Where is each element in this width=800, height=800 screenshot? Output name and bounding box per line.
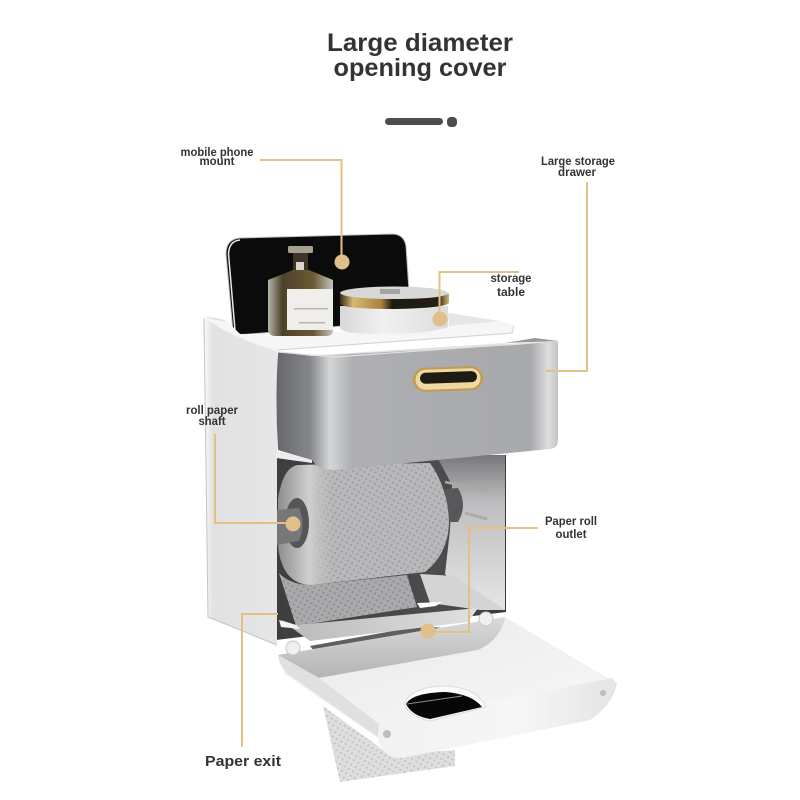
shelf under drawer bbox=[276, 451, 312, 463]
drawer contents bbox=[318, 343, 514, 358]
callout: large storage drawer bbox=[541, 156, 615, 371]
end pins bbox=[383, 730, 391, 738]
callout: large storage drawer: Large storage bbox=[541, 156, 615, 168]
roll core bbox=[285, 498, 309, 548]
paper outlet plate bbox=[279, 602, 492, 656]
callout: storage table bbox=[432, 272, 532, 326]
callout: mobile phone mount bbox=[180, 147, 350, 270]
right inner wall bbox=[436, 455, 505, 610]
left rim bbox=[278, 655, 379, 737]
callout: paper roll outlet: outlet bbox=[556, 529, 587, 541]
front curved wall bbox=[378, 678, 617, 758]
right shaft bbox=[445, 482, 487, 522]
phone bbox=[226, 234, 411, 335]
floor bbox=[319, 618, 608, 724]
drawer bbox=[276, 338, 558, 470]
hinges bbox=[286, 641, 300, 655]
storage table tray bbox=[204, 318, 513, 351]
callout: paper exit: Paper exit bbox=[205, 754, 281, 770]
cosmetic jar bbox=[340, 286, 449, 334]
callout: roll paper shaft bbox=[186, 405, 300, 532]
title ornament: bar and dot bbox=[385, 117, 457, 127]
callout: storage table: storage bbox=[490, 273, 532, 285]
cover body bbox=[278, 617, 617, 758]
callout: mobile phone mount: mount bbox=[200, 156, 235, 168]
callout: paper roll outlet: Paper roll bbox=[545, 516, 597, 528]
perfume bottle bbox=[268, 246, 333, 336]
hanging paper sheet bbox=[279, 573, 417, 626]
left side panel bbox=[204, 316, 277, 645]
callout: storage table: table bbox=[497, 287, 525, 299]
hanging paper below lid bbox=[323, 706, 455, 782]
callout: mobile phone mount: mobile phone bbox=[180, 147, 254, 159]
product illustration: toilet paper holder bbox=[204, 234, 617, 782]
back wall bbox=[278, 617, 505, 678]
flip cover bbox=[278, 612, 617, 758]
title bbox=[327, 29, 513, 82]
cavity floor bbox=[420, 574, 505, 610]
callout: roll paper shaft: shaft bbox=[198, 416, 226, 428]
paper roll bbox=[277, 463, 449, 585]
cavity back bbox=[276, 455, 506, 640]
callout: paper roll outlet bbox=[420, 516, 597, 638]
drawer handle bbox=[413, 366, 483, 392]
callout: roll paper shaft: roll paper bbox=[186, 405, 239, 417]
title: opening cover bbox=[334, 54, 507, 82]
callout: paper exit bbox=[205, 614, 281, 770]
callout: large storage drawer: drawer bbox=[558, 167, 597, 179]
paper hole bbox=[404, 686, 486, 721]
title: Large diameter bbox=[327, 29, 513, 57]
